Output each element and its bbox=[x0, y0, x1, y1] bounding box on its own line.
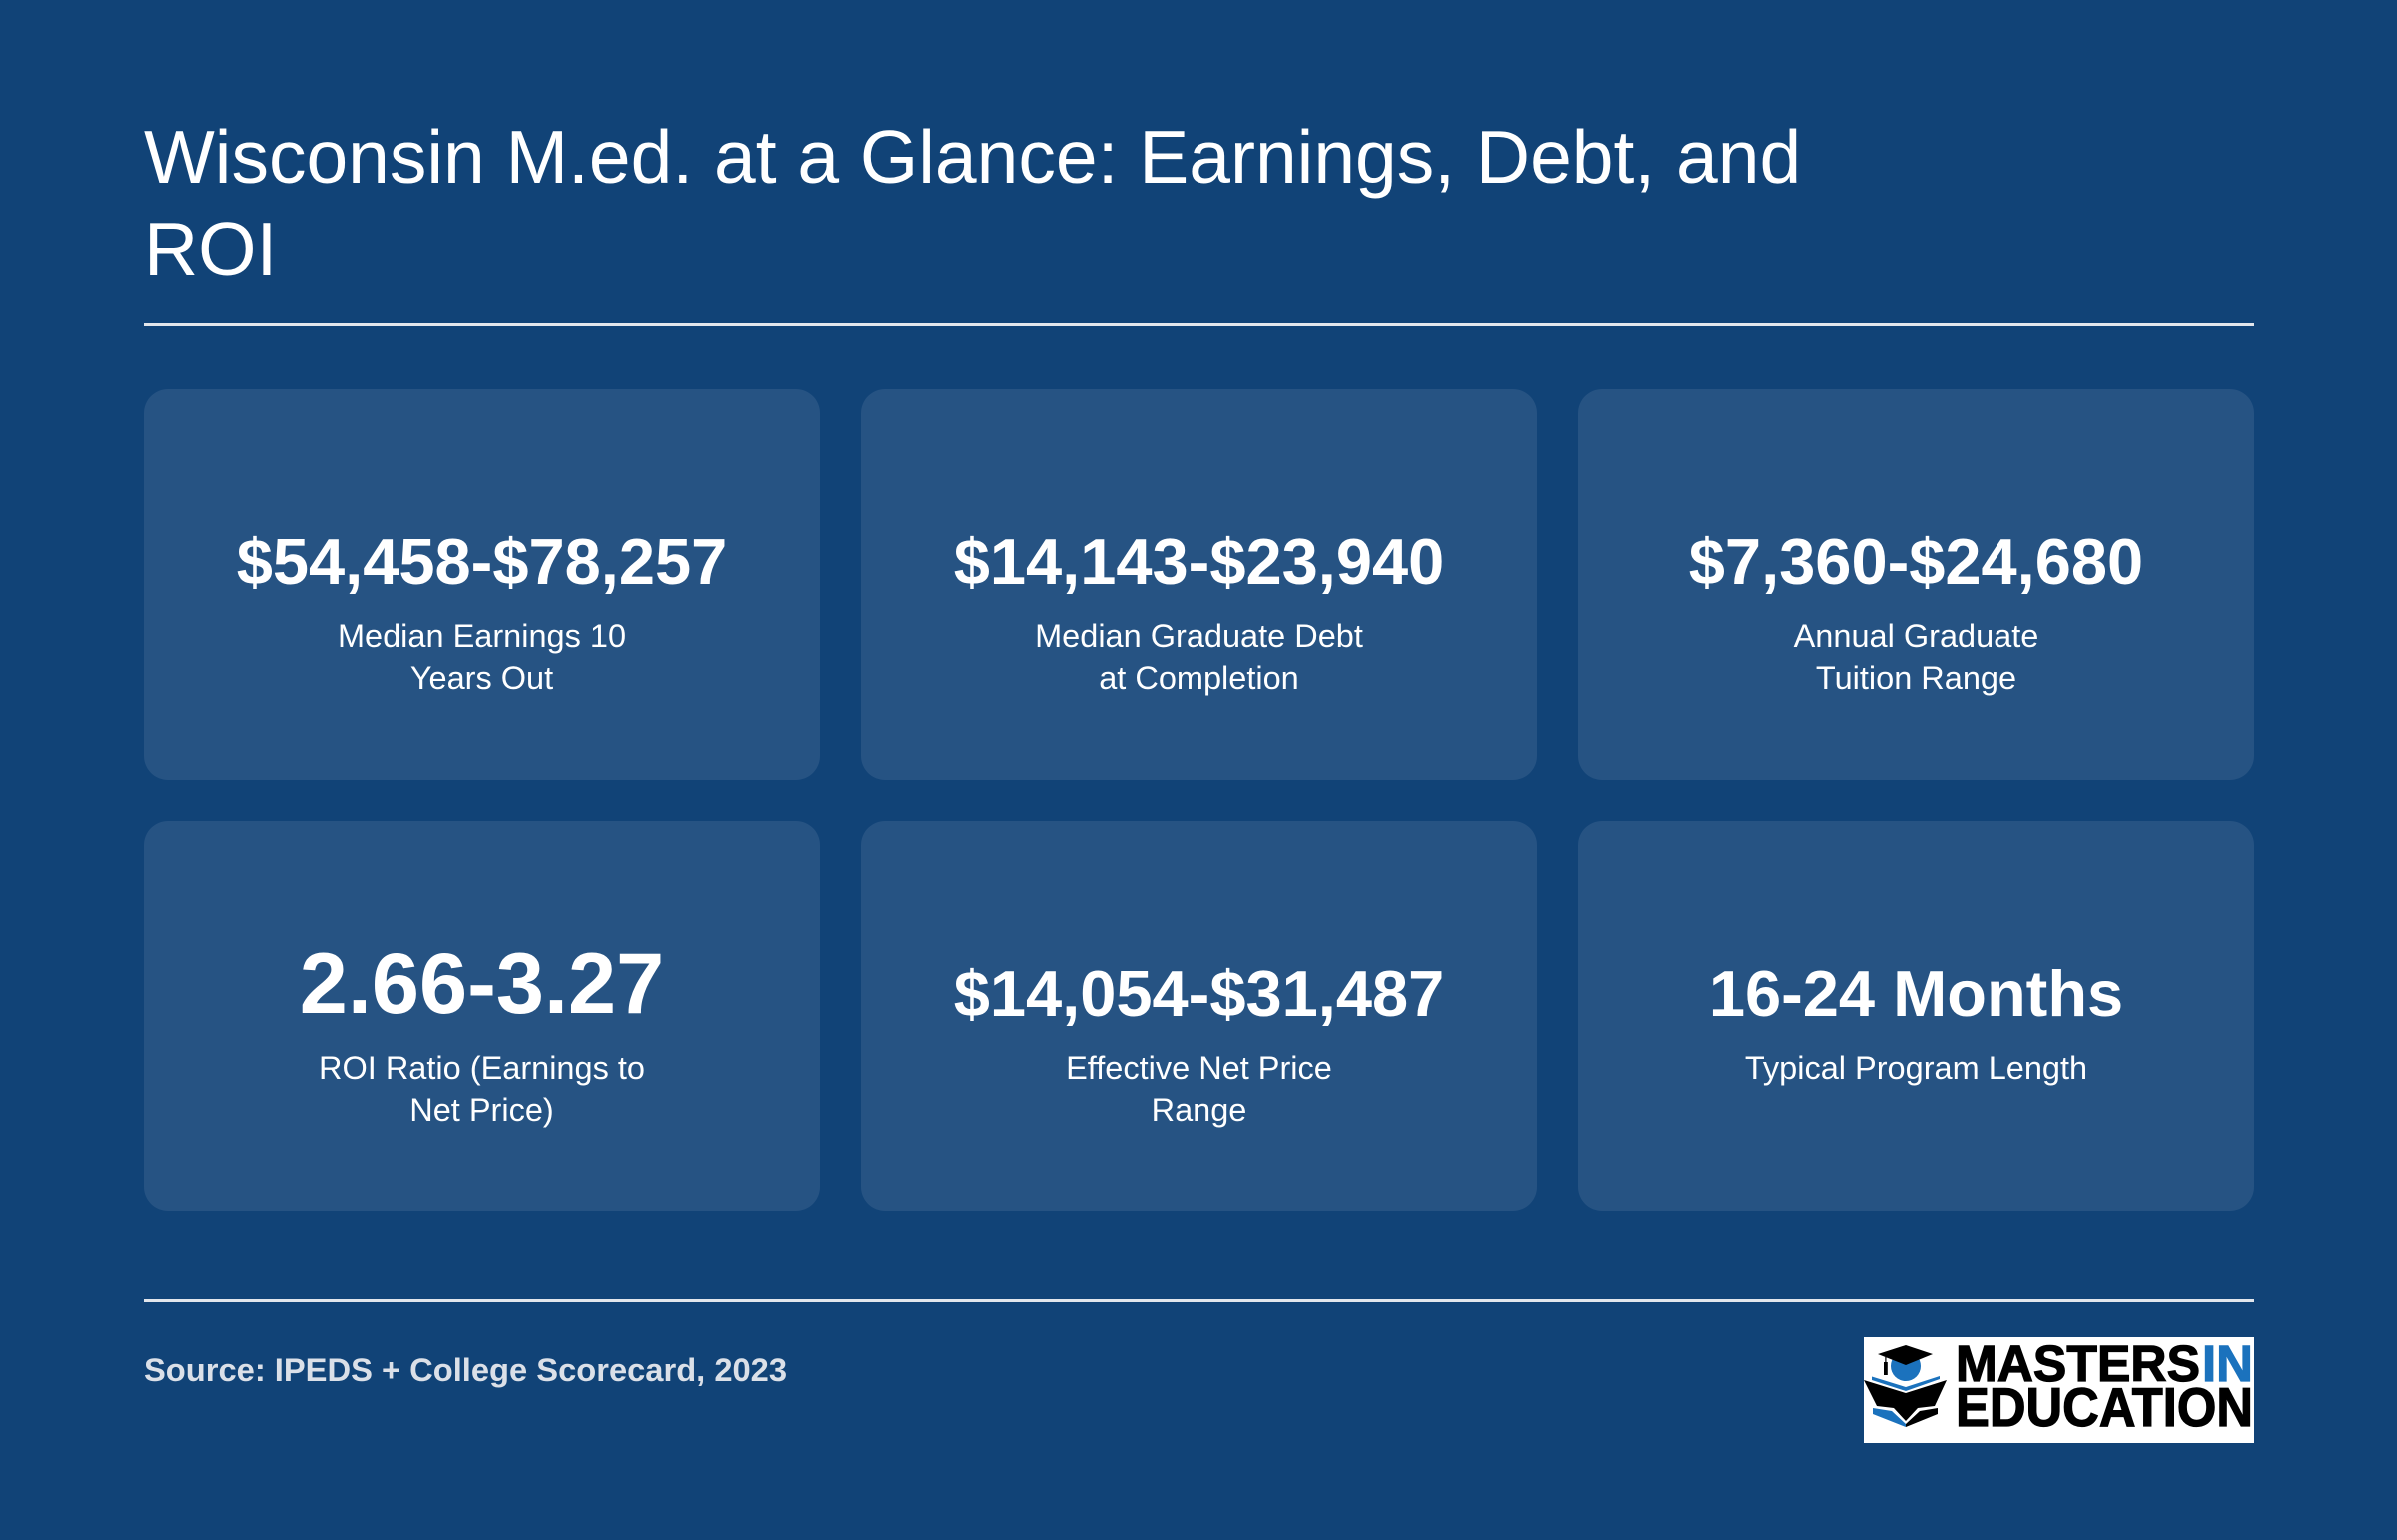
panel: ROI ratio bbox=[144, 821, 820, 1211]
value: debt: $14,143-$23,940 bbox=[954, 525, 1444, 598]
label: ROI: ROI Ratio (Earnings to bbox=[319, 1050, 645, 1086]
value: program length: 16-24 Months bbox=[1709, 957, 2123, 1030]
label: ROI: Net Price) bbox=[409, 1092, 554, 1128]
label: earnings: Median Earnings 10 bbox=[338, 618, 626, 654]
label: debt: Median Graduate Debt bbox=[1035, 618, 1363, 654]
value: tuition: $7,360-$24,680 bbox=[1689, 525, 2143, 598]
panel: net price bbox=[861, 821, 1537, 1211]
label: debt bbox=[1035, 618, 1363, 696]
icon: graduation cap and book bbox=[1864, 1345, 1947, 1427]
label: program length: Typical Program Length bbox=[1745, 1050, 2087, 1086]
label: net price bbox=[1066, 1050, 1332, 1128]
footer divider bbox=[144, 1299, 2254, 1302]
source note: Source: IPEDS + College Scorecard, 2023 bbox=[144, 1351, 787, 1388]
panel: median debt bbox=[861, 389, 1537, 780]
label: earnings: Years Out bbox=[410, 660, 553, 696]
value: ROI: 2.66-3.27 bbox=[300, 936, 664, 1032]
label: ROI bbox=[319, 1050, 645, 1128]
panel: program length bbox=[1578, 821, 2254, 1211]
title bbox=[144, 115, 1801, 291]
title: ROI bbox=[144, 207, 277, 291]
value: net price: $14,054-$31,487 bbox=[954, 957, 1444, 1030]
label: tuition: Annual Graduate bbox=[1794, 618, 2038, 654]
logo wordmark bbox=[1956, 1335, 2253, 1438]
header divider bbox=[144, 323, 2254, 326]
label: debt: at Completion bbox=[1099, 660, 1299, 696]
title: Wisconsin M.ed. at a Glance: Earnings, Debt, and bbox=[144, 115, 1801, 199]
label: tuition bbox=[1794, 618, 2038, 696]
panel: tuition bbox=[1578, 389, 2254, 780]
label: tuition: Tuition Range bbox=[1816, 660, 2016, 696]
label: earnings bbox=[338, 618, 626, 696]
logo: Masters in Education bbox=[1864, 1337, 2254, 1443]
label: net price: Range bbox=[1152, 1092, 1246, 1128]
panel: median earnings bbox=[144, 389, 820, 780]
value: earnings: $54,458-$78,257 bbox=[237, 525, 727, 598]
label: net price: Effective Net Price bbox=[1066, 1050, 1332, 1086]
